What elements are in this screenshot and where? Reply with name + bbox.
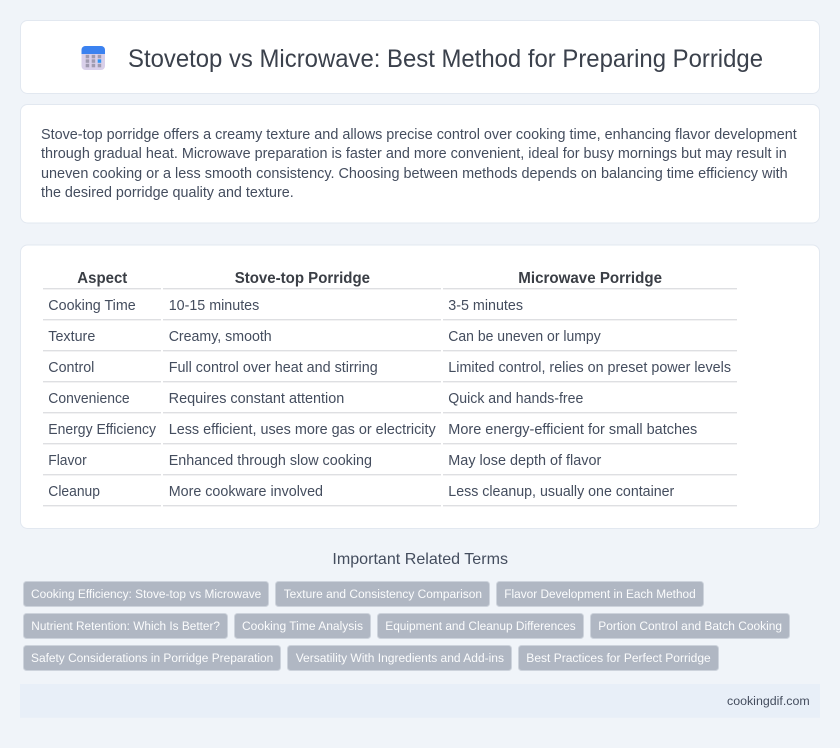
table row: Convenience: Convenience xyxy=(48,391,130,407)
icon: calendar xyxy=(82,46,105,70)
panel: related term tags: Cooking Efficiency: Stove-top vs Microwave xyxy=(31,587,261,601)
table row: Convenience xyxy=(48,391,583,407)
panel: related term tags: Best Practices for Perfect Porridge xyxy=(526,651,711,665)
table row: Cleanup xyxy=(48,484,674,500)
table row: Texture: Creamy, smooth xyxy=(169,329,272,345)
table row: Flavor xyxy=(48,453,602,469)
table row: Texture: Texture xyxy=(48,329,95,345)
table row: Control: Control xyxy=(48,360,94,376)
panel: related term tags: Portion Control and Batch Cooking xyxy=(598,619,782,633)
table row: Cleanup: More cookware involved xyxy=(169,484,323,500)
table row: Texture: Can be uneven or lumpy xyxy=(448,329,601,345)
table row: Cooking Time: 3-5 minutes xyxy=(448,298,523,314)
panel: description: uneven cooking or a less smooth consistency. Choosing between methods depends on balancing time efficiency with xyxy=(41,166,788,182)
table row: Flavor: Flavor xyxy=(48,453,87,469)
table row: Flavor: May lose depth of flavor xyxy=(448,453,602,469)
table row: Control: Limited control, relies on preset power levels xyxy=(448,360,731,376)
table header row xyxy=(77,270,662,287)
panel: description: through gradual heat. Microwave preparation is faster and more convenient, ideal for busy mornings but may result in xyxy=(41,146,787,162)
table row: Cleanup: Cleanup xyxy=(48,484,100,500)
table row: Control xyxy=(48,360,731,376)
footer: cookingdif.com xyxy=(727,694,810,708)
table row: Energy Efficiency: More energy-efficient for small batches xyxy=(448,422,697,438)
title: Stovetop vs Microwave: Best Method for Preparing Porridge xyxy=(128,46,763,73)
panel: related term tags: Cooking Time Analysis xyxy=(242,619,363,633)
table row: Control: Full control over heat and stirring xyxy=(169,360,378,376)
table row: Flavor: Enhanced through slow cooking xyxy=(169,453,372,469)
heading: related terms: Important Related Terms xyxy=(332,551,508,568)
table row: Cooking Time: Cooking Time xyxy=(48,298,136,314)
table header row: Stove-top Porridge xyxy=(235,270,370,287)
panel: description: the desired porridge quality and texture. xyxy=(41,185,294,201)
panel: header xyxy=(20,20,820,94)
panel: description xyxy=(20,104,820,223)
table header row: Microwave Porridge xyxy=(518,270,662,287)
panel: related term tags: Nutrient Retention: Which Is Better? xyxy=(31,619,220,633)
table row: Texture xyxy=(48,329,601,345)
table row: Cleanup: Less cleanup, usually one container xyxy=(448,484,674,500)
table row: Energy Efficiency: Less efficient, uses more gas or electricity xyxy=(169,422,437,438)
table row: Convenience: Requires constant attention xyxy=(169,391,344,407)
panel: comparison table xyxy=(20,245,820,528)
footer xyxy=(20,684,820,718)
panel: related term tags: Versatility With Ingredients and Add-ins xyxy=(296,651,504,665)
panel: related term tags: Texture and Consistency Comparison xyxy=(284,587,482,601)
panel: related term tags: Equipment and Cleanup Differences xyxy=(385,619,576,633)
table row: Cooking Time: 10-15 minutes xyxy=(169,298,259,314)
table row: Cooking Time xyxy=(48,298,523,314)
panel: related term tags xyxy=(24,582,790,670)
table row: Energy Efficiency: Energy Efficiency xyxy=(48,422,157,438)
panel: related term tags: Flavor Development in Each Method xyxy=(504,587,696,601)
panel: related term tags: Safety Considerations in Porridge Preparation xyxy=(31,651,273,665)
table header row: Aspect xyxy=(77,270,127,287)
table row: Energy Efficiency xyxy=(48,422,697,438)
table row: Convenience: Quick and hands-free xyxy=(448,391,583,407)
panel: description: Stove-top porridge offers a creamy texture and allows precise control over cooking time, enhancing flavor development xyxy=(41,127,797,143)
